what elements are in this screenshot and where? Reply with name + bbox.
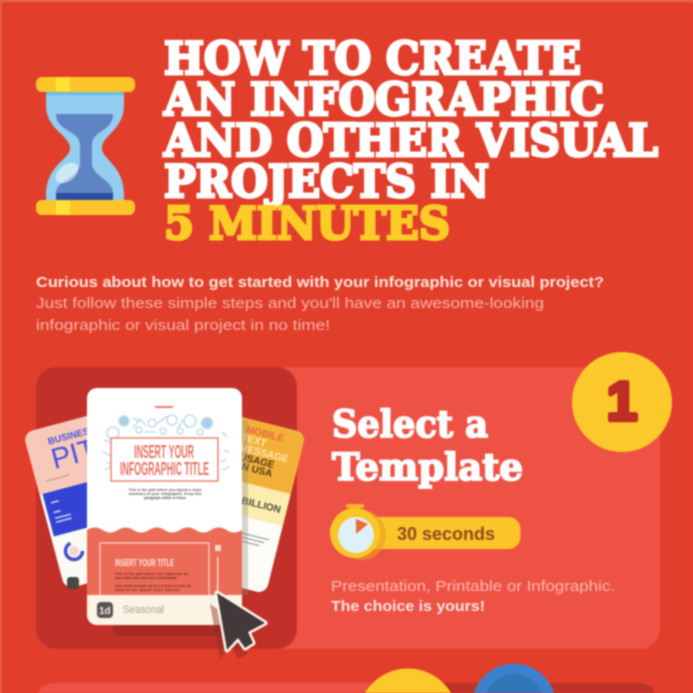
title: HOW TO CREATE <box>164 32 581 85</box>
main template card: INFOGRAPHIC TITLE <box>120 459 209 479</box>
step description <box>331 578 615 615</box>
card description: summary of your infographic. Keep this <box>128 492 202 496</box>
template card: mobile text message: IN USA <box>238 461 273 480</box>
donut chart <box>66 542 82 560</box>
main template card: long as the layout feels spaced <box>115 588 179 592</box>
main template card <box>87 388 242 625</box>
wavy coral section <box>87 528 242 596</box>
template card: business pitch: BUSINESS <box>47 424 97 448</box>
step number badge: 1 <box>607 370 637 432</box>
main template card: INSERT YOUR TITLE <box>115 558 174 569</box>
intro text <box>36 274 604 334</box>
intro text: infographic or visual project in no time! <box>36 317 330 334</box>
template card: mobile text message: MOBILE <box>245 425 285 445</box>
main template card: INSERT YOUR <box>134 442 194 462</box>
title: PROJECTS IN <box>164 155 489 208</box>
main template card: You could include up to 2-3 lines of text, so <box>115 584 192 588</box>
intro text: Curious about how to get started with your infographic or visual project? <box>36 274 604 291</box>
card footer <box>97 602 113 618</box>
title: AN INFOGRAPHIC <box>163 73 604 126</box>
template card: mobile text message: BILLION <box>240 496 282 516</box>
doodle pattern <box>103 415 229 470</box>
step heading <box>332 402 523 489</box>
main template card: 1d <box>99 606 111 617</box>
panel: step 1 <box>23 352 672 660</box>
icon: cursor <box>210 593 265 660</box>
main card shadow <box>113 612 242 636</box>
main template card: Seasonal <box>123 604 164 616</box>
panel: step 2 top edge <box>36 664 654 693</box>
template card: mobile text message: TEXT <box>240 433 267 450</box>
image panel <box>36 367 297 649</box>
step description: The choice is yours! <box>331 598 485 615</box>
card description: This is the part where you layout a short <box>128 488 202 492</box>
card description <box>128 488 202 500</box>
step heading: Template <box>332 445 523 489</box>
timer pill: 30 seconds <box>397 524 495 544</box>
step 2 blue icon <box>474 664 554 693</box>
template card: mobile text message: MESSAGE <box>238 442 290 465</box>
template card: mobile text message <box>241 416 305 593</box>
title: AND OTHER VISUAL <box>163 114 658 167</box>
icon: stopwatch <box>330 504 380 558</box>
title frame <box>111 438 218 481</box>
icon: hourglass <box>36 77 135 215</box>
title: 5 MINUTES <box>164 197 450 250</box>
step heading: Select a <box>332 402 488 446</box>
template card: mobile text message: USAGE <box>238 452 276 471</box>
panel background <box>36 367 660 649</box>
template card: business pitch: PIT <box>48 433 100 476</box>
main template card: your topic and add more information <box>115 576 177 580</box>
logo mark <box>67 577 79 589</box>
step number badge <box>572 352 672 452</box>
lower frame <box>100 543 209 595</box>
card description: paragraph within 3-4 lines <box>144 496 186 500</box>
title <box>163 32 658 250</box>
main template card: This is the part where you elaborate on <box>115 572 188 576</box>
step description: Presentation, Printable or Infographic. <box>331 578 615 595</box>
template card: business pitch <box>24 415 88 586</box>
step 2 number badge <box>365 669 451 693</box>
intro text: Just follow these simple steps and you'll have an awesome-looking <box>36 295 544 312</box>
timer pill <box>330 504 520 560</box>
